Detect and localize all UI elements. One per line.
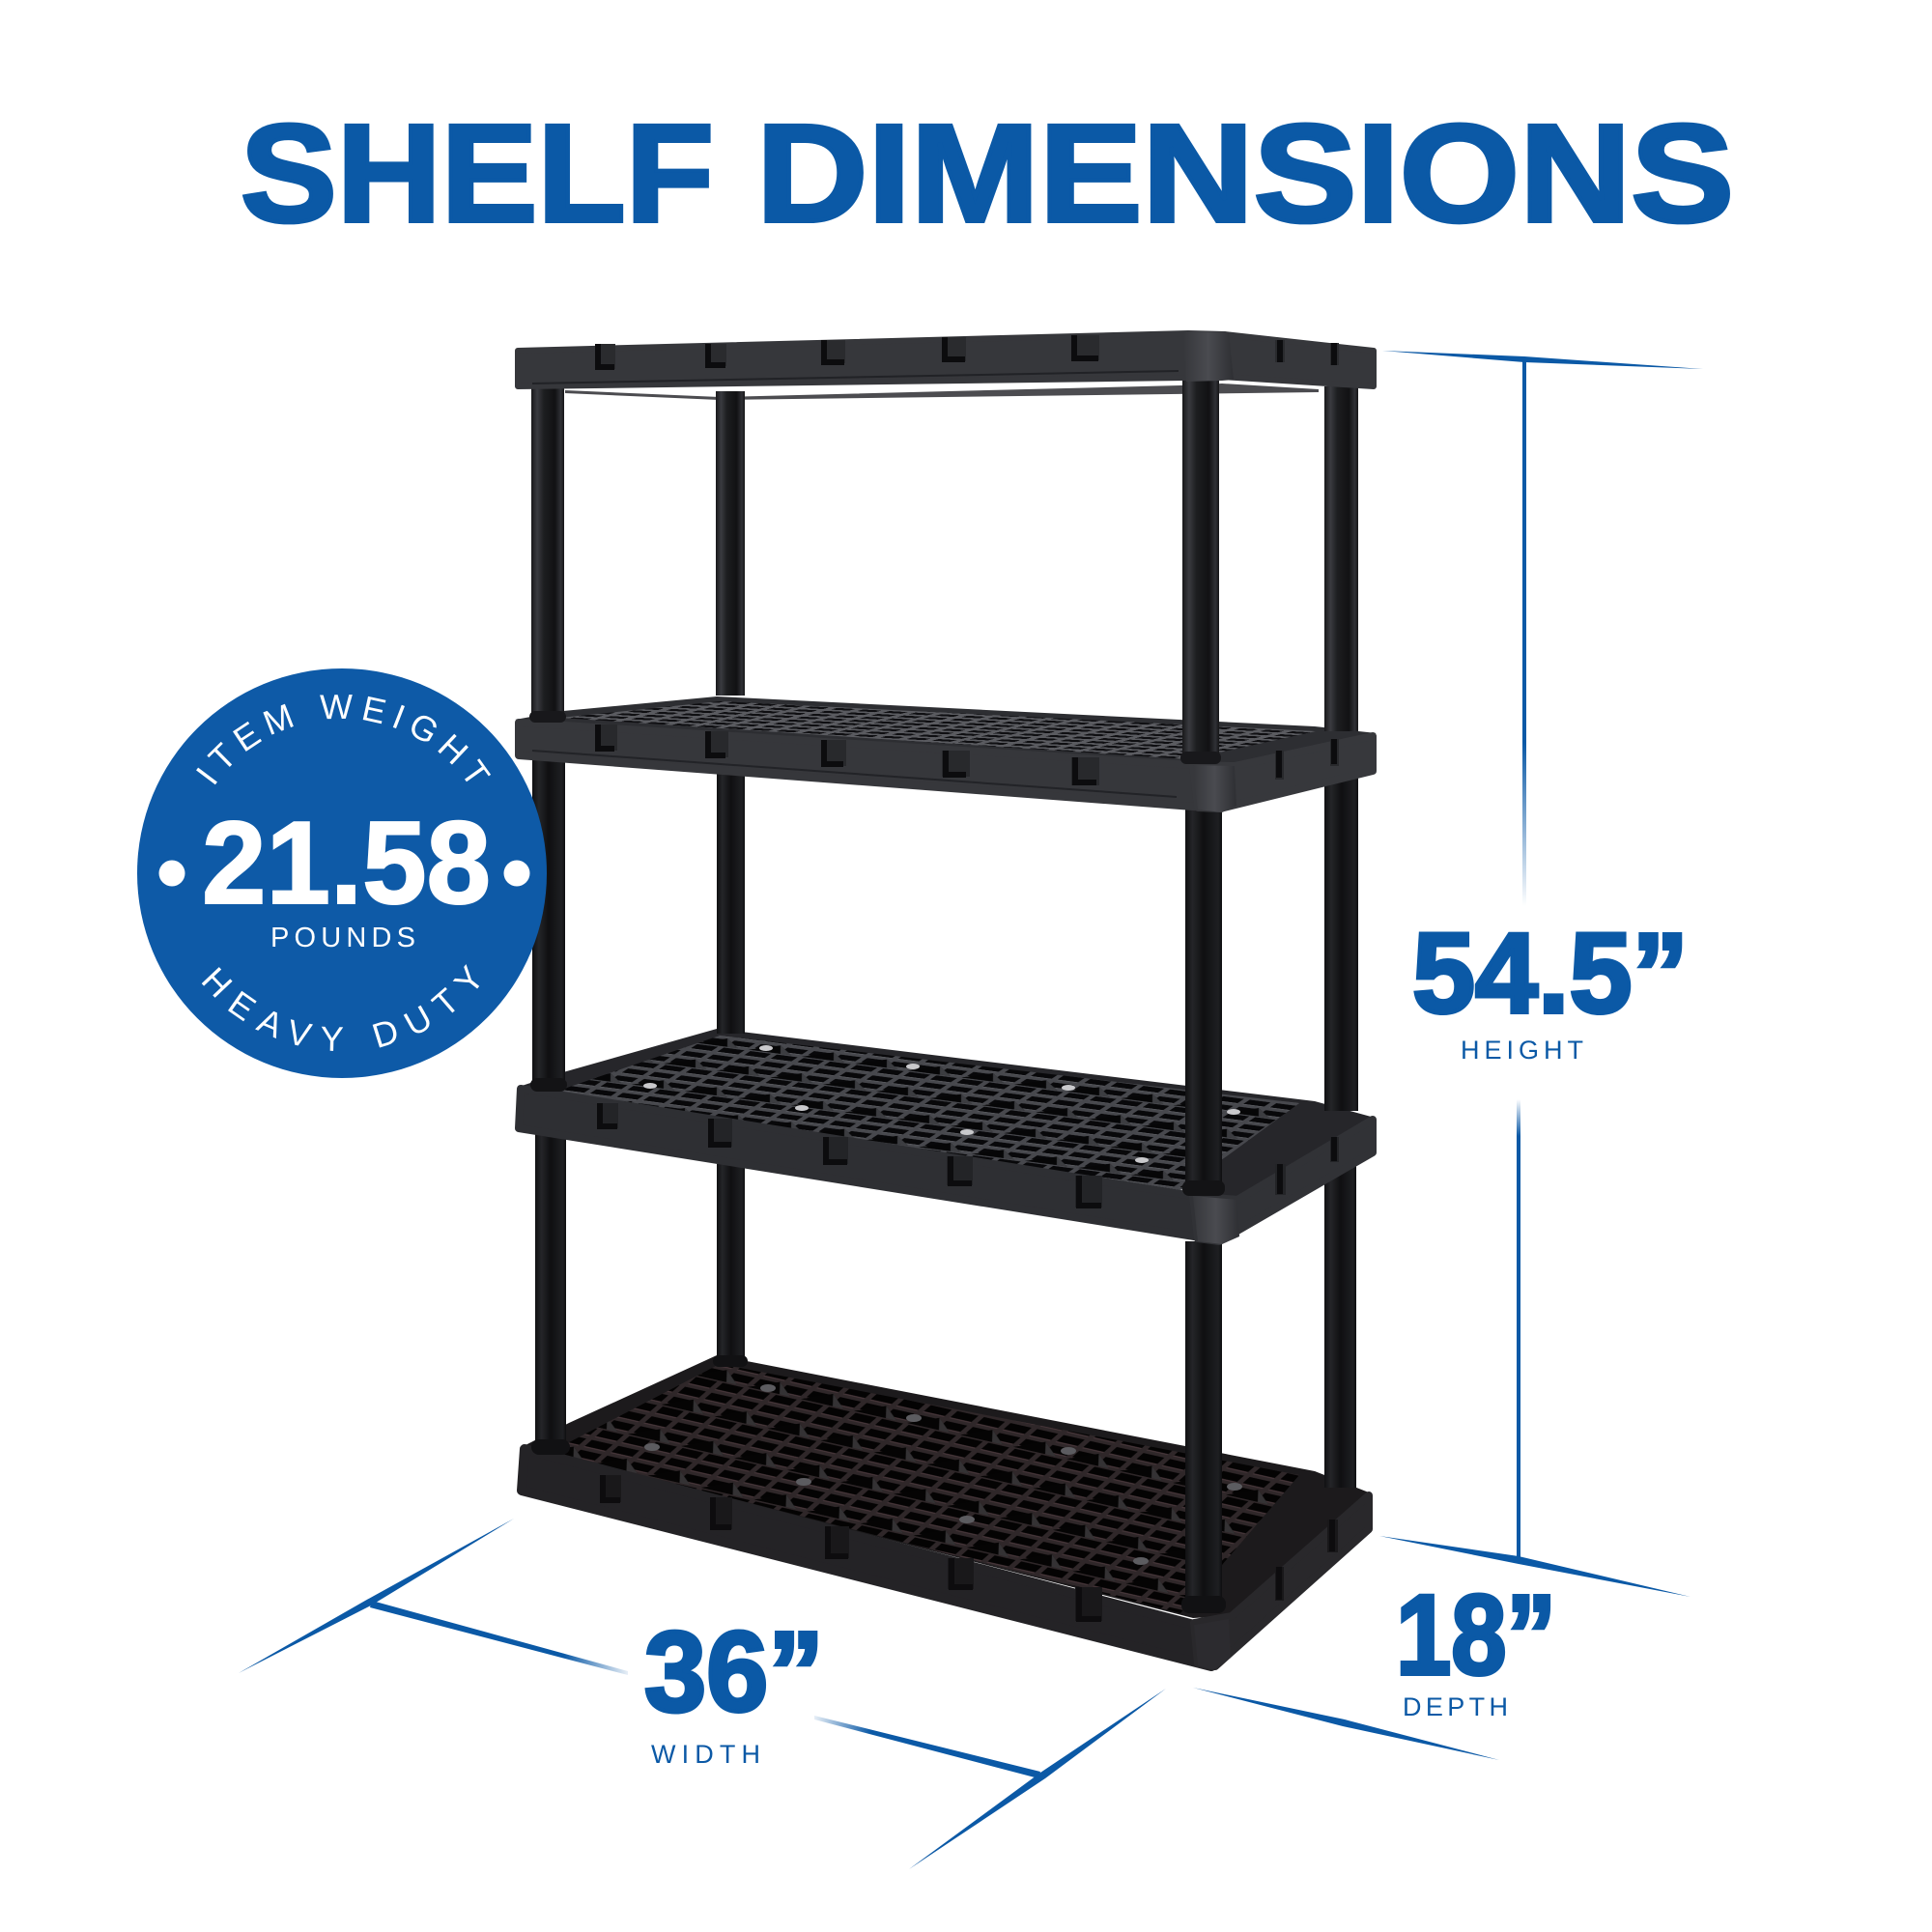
legs: upper level — [529, 379, 1358, 764]
badge: item weight: HEAVY DUTY — [201, 964, 479, 1051]
badge dot right — [504, 860, 529, 887]
second shelf — [515, 696, 1377, 812]
badge dot left — [158, 860, 185, 887]
label: width caption: WIDTH — [651, 1740, 760, 1769]
badge arc text: item weight — [187, 719, 497, 873]
badge weight value: 21.58 — [202, 797, 491, 928]
title — [241, 96, 1734, 251]
dimension arrows: depth — [1193, 1688, 1499, 1760]
badge: item weight: ITEM WEIGHT — [196, 695, 491, 784]
label: depth value: 18” — [1396, 1572, 1556, 1699]
badge: item weight — [137, 668, 547, 1078]
dimension arrows: width — [239, 1519, 1166, 1869]
label: height caption: HEIGHT — [1461, 1036, 1583, 1065]
third shelf — [519, 1029, 1375, 1244]
title: DIMENSIONS — [756, 96, 1734, 251]
shelf unit photo — [515, 331, 1377, 1670]
label: height value: 54.5” — [1412, 910, 1689, 1037]
badge unit: POUNDS — [270, 923, 415, 953]
legs: middle level — [530, 753, 1358, 1196]
top shelf — [518, 331, 1374, 386]
dimension arrows: height — [1379, 351, 1703, 1597]
bottom shelf — [522, 1355, 1369, 1670]
badge arc text: heavy duty — [164, 873, 520, 1051]
label: width value: 36” — [644, 1608, 824, 1736]
legs: lower level — [531, 1130, 1356, 1613]
label: depth caption: DEPTH — [1403, 1692, 1508, 1721]
title: SHELF — [241, 96, 714, 251]
